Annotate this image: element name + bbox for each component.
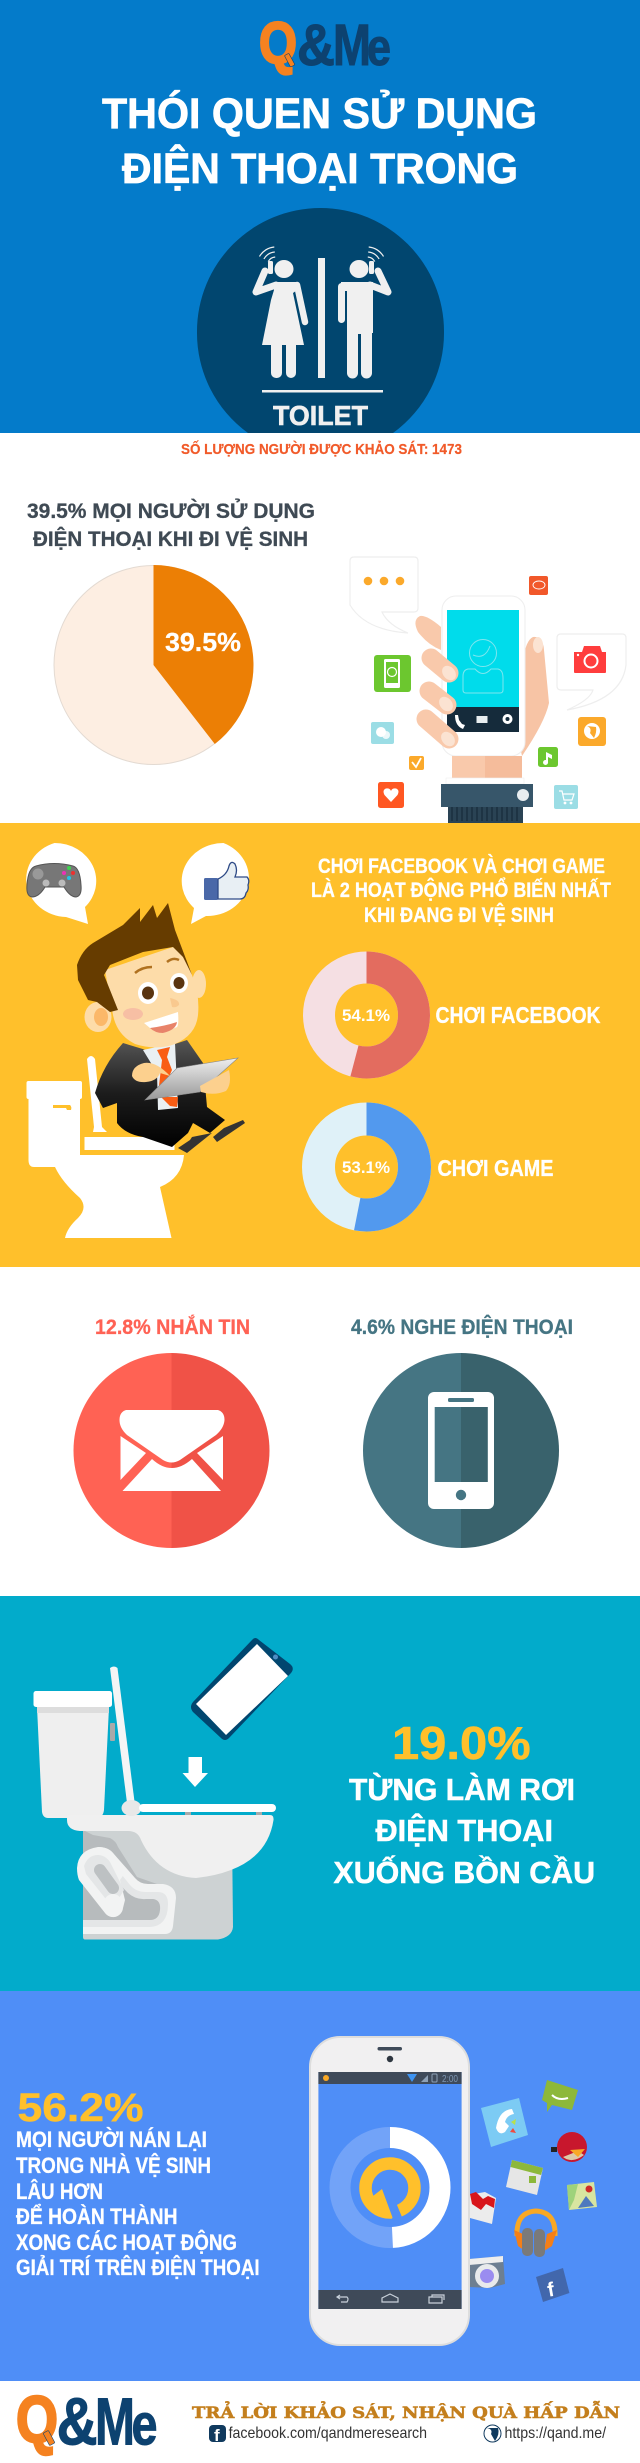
- icon: map: [567, 2182, 597, 2210]
- base: [83, 1831, 233, 1940]
- text: dropped phone: ĐIỆN THOẠI: [376, 1812, 553, 1848]
- title: ĐIỆN THOẠI TRONG: [122, 144, 518, 193]
- label: toilet: TOILET: [273, 400, 368, 431]
- website link: https://qand.me/: [504, 2425, 606, 2442]
- icon: woman with phone: [256, 247, 305, 378]
- stat: 19.0%: 19.0%: [392, 1717, 531, 1769]
- eyes and brows: [135, 959, 188, 1004]
- text: staying longer: [16, 2127, 260, 2280]
- heading: 39.5% MỌI NGƯỜI SỬ DỤNG: [27, 499, 315, 523]
- donut chart: [340, 2138, 440, 2238]
- divider: [318, 258, 325, 378]
- panel: header: [0, 0, 640, 433]
- logo mark: Q arrow: [366, 2164, 414, 2222]
- illustration: phone with chart: [310, 2037, 469, 2345]
- logo: Q&Me: [259, 11, 391, 78]
- icon: headphones: [514, 2211, 557, 2257]
- icon: thumb up: [204, 862, 249, 900]
- call to action: TRẢ LỜI KHẢO SÁT, NHẬN QUÀ HẤP DẪN: [192, 2399, 620, 2422]
- status bar: 2:00: [442, 2074, 458, 2085]
- logo: Q&Me: e: [132, 2392, 158, 2458]
- speech bubble: camera: [557, 634, 626, 710]
- shirt: [143, 1043, 178, 1110]
- text: staying longer: GIẢI TRÍ TRÊN ĐIỆN THOẠI: [16, 2255, 260, 2280]
- wrist and cuff: [441, 756, 533, 823]
- nav bar: [318, 2290, 462, 2309]
- right ear: [192, 970, 206, 998]
- thumb nail: [533, 637, 543, 653]
- hands: [132, 1063, 230, 1094]
- icon: toilet sign: [197, 208, 444, 433]
- hinge and lid: [110, 1666, 135, 1803]
- icon: green phone: [374, 655, 411, 692]
- pie chart: [54, 565, 253, 764]
- text: dropped phone: XUỐNG BỒN CẦU: [334, 1854, 595, 1890]
- left ear: [84, 1002, 112, 1032]
- phone: [442, 596, 525, 756]
- icon: check: [409, 756, 424, 770]
- illustration: white toilet: [26, 1056, 184, 1238]
- tie: [157, 1047, 178, 1107]
- logo: Q&Me: Q: [16, 2382, 58, 2456]
- cheek and nose: [123, 998, 179, 1020]
- title: [102, 89, 537, 193]
- heading: [311, 855, 611, 927]
- title: THÓI QUEN SỬ DỤNG: [102, 89, 537, 138]
- panel: texting and calling: [0, 1267, 640, 1596]
- panel: dropped phone: [0, 1596, 640, 1991]
- logo: Q&Me: &: [57, 2384, 98, 2460]
- text: staying longer: MỌI NGƯỜI NÁN LẠI: [16, 2127, 207, 2152]
- donut chart: game: 53.1%: [342, 1158, 390, 1177]
- speech bubble: controller: [26, 843, 96, 924]
- arrow: down: [182, 1757, 208, 1787]
- tablet: [145, 1058, 238, 1100]
- text: dropped phone: TỪNG LÀM RƠI: [349, 1771, 575, 1807]
- speech bubble: dots: [350, 557, 418, 633]
- donut chart: facebook: 54.1%: [342, 1006, 390, 1025]
- label: calling: 4.6% NGHE ĐIỆN THOẠI: [351, 1315, 573, 1339]
- logo: Q&Me: &: [297, 13, 335, 78]
- heading: ĐIỆN THOẠI KHI ĐI VỆ SINH: [33, 527, 308, 551]
- logo: Q&Me: [16, 2382, 158, 2460]
- face: [105, 947, 198, 1048]
- icon: cloud: [529, 576, 548, 595]
- text: staying longer: LÂU HƠN: [16, 2179, 103, 2204]
- facebook link: f: [214, 2426, 220, 2445]
- icon: camera: [469, 2256, 505, 2288]
- panel: facebook and games: [0, 823, 640, 1267]
- logo: Q&Me: Q: [259, 11, 297, 76]
- bowl: [67, 1815, 274, 1878]
- status bar: [318, 2072, 462, 2085]
- icon: falling phone: [191, 1638, 293, 1740]
- label: game: CHƠI GAME: [438, 1155, 554, 1181]
- facebook link: facebook.com/qandmeresearch: [229, 2425, 427, 2442]
- icon: globe: [578, 717, 606, 746]
- icon: gmail: [468, 2192, 496, 2224]
- icon: music: [538, 747, 558, 767]
- label: texting: 12.8% NHẮN TIN: [95, 1315, 250, 1339]
- text: staying longer: ĐỂ HOÀN THÀNH: [16, 2204, 178, 2229]
- tank: [37, 1707, 109, 1818]
- seat: [139, 1804, 276, 1812]
- icon: heart: [378, 782, 404, 808]
- mouth: [144, 1012, 178, 1033]
- text: staying longer: TRONG NHÀ VỆ SINH: [16, 2153, 211, 2178]
- donut chart: game: [318, 1119, 414, 1215]
- illustration: businessman with tablet: [77, 903, 245, 1153]
- hand fingers: [426, 658, 459, 749]
- shoes: [178, 1133, 212, 1153]
- logo: Q&Me: M: [333, 13, 371, 78]
- survey size: SỐ LƯỢNG NGƯỜI ĐƯỢC KHẢO SÁT: 1473: [181, 440, 462, 458]
- illustration: hand holding phone: [350, 557, 626, 823]
- stat: 56.2%: 56.2%: [18, 2086, 144, 2130]
- hand behind: [415, 616, 549, 756]
- icon: chat: [371, 722, 394, 744]
- label: facebook: CHƠI FACEBOOK: [436, 1002, 601, 1028]
- icon: message: [542, 2080, 578, 2112]
- icon: phone circle: [363, 1353, 559, 1548]
- body suit: [95, 1040, 225, 1147]
- logo: Q&Me: M: [95, 2384, 135, 2460]
- icon: envelope circle: [74, 1353, 270, 1548]
- text: dropped phone: [334, 1771, 595, 1890]
- heading: [27, 499, 315, 551]
- speech bubble: like: [182, 843, 249, 924]
- icon: facebook: f: [546, 2279, 556, 2302]
- text: staying longer: XONG CÁC HOẠT ĐỘNG: [16, 2230, 237, 2255]
- trap pipe: [77, 1847, 176, 1934]
- panel: survey and pie: [0, 433, 640, 823]
- illustration: toilet: [34, 1666, 276, 1940]
- panel: staying longer: [0, 1991, 640, 2381]
- icon: phone call tile: [481, 2098, 528, 2147]
- icon: calendar: [506, 2160, 543, 2195]
- icon: angry bird: [551, 2132, 587, 2162]
- hair: [77, 903, 192, 1012]
- icon: game controller: [27, 864, 81, 897]
- heading: KHI ĐANG ĐI VỆ SINH: [364, 903, 554, 927]
- icon: man with phone: [338, 247, 388, 378]
- donut chart: facebook: [319, 968, 414, 1062]
- panel: footer: [0, 2381, 640, 2463]
- icon: cart: [554, 785, 578, 809]
- logo: Q&Me: e: [367, 19, 391, 77]
- icon: facebook: [536, 2268, 569, 2302]
- pie chart: 39.5%: [165, 627, 241, 657]
